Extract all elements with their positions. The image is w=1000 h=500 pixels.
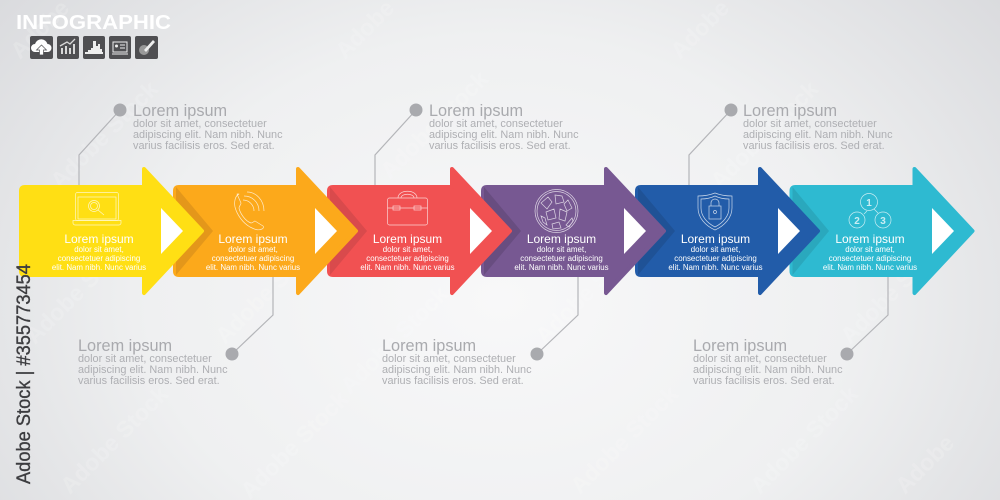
watermark pattern: Adobe [890,430,959,499]
watermark pattern: Adobe Stock [565,381,683,499]
callout: bottom 1: Lorem ipsum [78,337,172,355]
callout: top 1 [79,102,283,185]
callout: top 2: Lorem ipsum [429,102,523,120]
arrow 1: yellow [21,169,202,293]
icon: briefcase [388,191,428,225]
arrow 1 text: elit. Nam nibh. Nunc varius [52,263,146,272]
callout: bottom 2: varius facilisis eros. Sed erat. [382,375,524,387]
arrow 1 text [52,232,146,272]
callout: top 3 [689,102,893,185]
arrow 5 text: elit. Nam nibh. Nunc varius [668,263,763,272]
watermark pattern: Adobe Stock [210,231,328,349]
watermark pattern: Adobe Stock [835,231,953,349]
icon: growth chart [57,36,79,59]
stock id label: Adobe Stock | #355773454 [14,264,35,484]
callout: bottom 3: varius facilisis eros. Sed erat. [693,375,835,387]
arrow 2 text: Lorem ipsum [218,232,288,246]
title: INFOGRAPHIC [16,11,171,34]
callout: top 2: varius facilisis eros. Sed erat. [429,140,571,152]
arrow 4: purple [483,169,664,293]
watermark pattern: Adobe Stock [745,381,863,499]
callout: top 3: dolor sit amet, consectetuer [743,118,877,130]
arrow 3 text: dolor sit amet, [383,245,432,254]
arrow 5 text: dolor sit amet, [691,245,740,254]
arrow 3 text [360,232,455,272]
icon row [30,36,158,59]
arrow 6 text [823,232,917,272]
icon: bar histogram [83,36,105,59]
callout: top 2: adipiscing elit. Nam nibh. Nunc [429,129,579,141]
callout: top 1: varius facilisis eros. Sed erat. [133,140,275,152]
arrow 4 text: dolor sit amet, [537,245,586,254]
icon: three linked circles: 2 [854,216,860,227]
callout: bottom 3: dolor sit amet, consectetuer [693,353,827,365]
callout: bottom 2: dolor sit amet, consectetuer [382,353,516,365]
arrow 6 text: elit. Nam nibh. Nunc varius [823,263,917,272]
arrow 5: blue [637,169,818,293]
arrow 6: teal [792,169,972,293]
arrow 3 text: elit. Nam nibh. Nunc varius [360,263,455,272]
callout: bottom 1: dolor sit amet, consectetuer [78,353,212,365]
watermark pattern: Adobe Stock [45,76,163,194]
arrow 3 text: consectetuer adipiscing [366,254,449,263]
arrow 5 text [668,232,763,272]
icon: three linked circles: 1 [866,198,872,209]
watermark pattern: Adobe Stock [20,231,138,349]
callout: bottom 1: adipiscing elit. Nam nibh. Nunc [78,364,228,376]
arrow 2 text [206,232,300,272]
arrow 4 text: Lorem ipsum [527,232,596,246]
icon: pencil and pie [135,36,158,59]
callout: bottom 2 [382,277,578,387]
arrow 6 text: consectetuer adipiscing [829,254,911,263]
callout: bottom 2: Lorem ipsum [382,337,476,355]
icon: shield with padlock [698,193,732,230]
arrow 2: orange [175,169,356,293]
icon: three linked circles: 3 [880,216,886,227]
callout: bottom 2: adipiscing elit. Nam nibh. Nunc [382,364,532,376]
callout: bottom 1: varius facilisis eros. Sed erat. [78,375,220,387]
arrow 4 text: consectetuer adipiscing [520,254,603,263]
callout: top 2: dolor sit amet, consectetuer [429,118,563,130]
arrow 2 text: dolor sit amet, [228,245,278,254]
callout: bottom 3: adipiscing elit. Nam nibh. Nunc [693,364,843,376]
icon: cloud upload [30,36,53,59]
icon: id card [109,36,131,59]
icon: globe [535,190,578,232]
watermark pattern: Adobe Stock [530,231,648,349]
arrow 5 text: consectetuer adipiscing [674,254,757,263]
arrow 2 text: consectetuer adipiscing [212,254,294,263]
arrow 4 text: elit. Nam nibh. Nunc varius [514,263,609,272]
arrow 5 text: Lorem ipsum [681,232,750,246]
callout: bottom 1 [78,277,273,387]
watermark pattern: Adobe Stock [375,66,493,184]
arrow 4 text [514,232,609,272]
watermark pattern: Adobe Stock [55,381,173,499]
watermark pattern: Adobe Stock [335,281,453,399]
callout: top 1: adipiscing elit. Nam nibh. Nunc [133,129,283,141]
arrow 1 text: Lorem ipsum [64,232,134,246]
callout: bottom 3 [693,277,888,387]
arrow 2 text: elit. Nam nibh. Nunc varius [206,263,300,272]
arrow 3 text: Lorem ipsum [373,232,442,246]
watermark pattern: Adobe Stock [705,76,823,194]
icon: phone [235,192,264,230]
callout: bottom 3: Lorem ipsum [693,337,787,355]
arrow 6 text: dolor sit amet, [845,245,895,254]
arrow 1 text: consectetuer adipiscing [58,254,140,263]
callout: top 3: adipiscing elit. Nam nibh. Nunc [743,129,893,141]
callout: top 2 [375,102,579,185]
callout: top 1: dolor sit amet, consectetuer [133,118,267,130]
callout: top 1: Lorem ipsum [133,102,227,120]
icon: laptop with magnifier [73,192,121,225]
callout: top 3: Lorem ipsum [743,102,837,120]
arrow 6 text: Lorem ipsum [835,232,905,246]
arrow 1 text: dolor sit amet, [74,245,124,254]
icon: three linked circles [849,194,891,228]
callout: top 3: varius facilisis eros. Sed erat. [743,140,885,152]
arrow 3: red [329,169,510,293]
